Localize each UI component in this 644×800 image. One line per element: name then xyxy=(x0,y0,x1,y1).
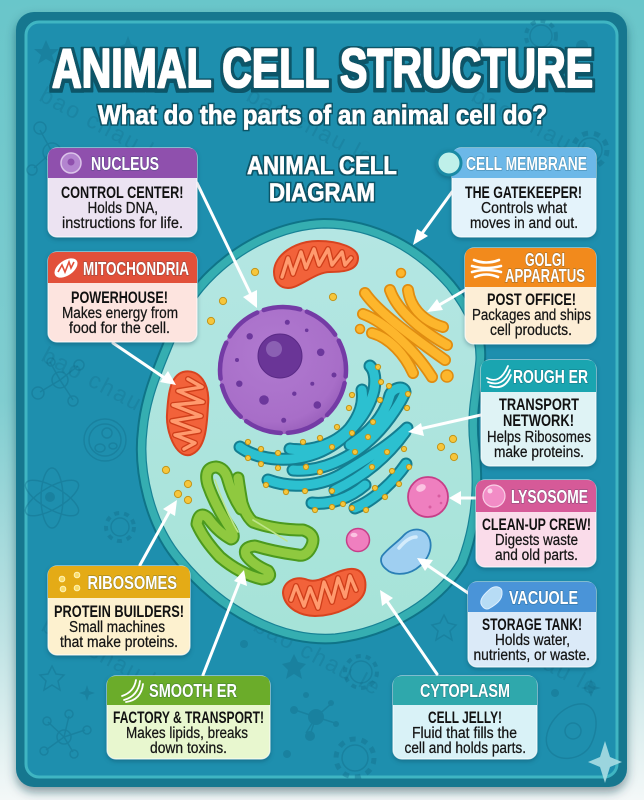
panel: cell membrane: Controls what xyxy=(481,200,568,217)
panel: ribosomes xyxy=(48,566,190,655)
icon: golgi stack xyxy=(472,260,501,277)
panel: rough ER: Helps Ribosomes xyxy=(487,429,591,446)
rough endoplasmic reticulum xyxy=(240,366,407,508)
icon: lysosome xyxy=(483,485,505,507)
panel: golgi apparatus: GOLGI xyxy=(525,250,565,270)
watermark text: bao chau le xyxy=(468,346,604,436)
nucleolus xyxy=(258,334,302,378)
mitochondrion: top xyxy=(274,241,358,288)
panel: nucleus: instructions for life. xyxy=(62,215,183,232)
panel: vacuole: Holds water, xyxy=(495,632,570,649)
icon: ribosome dots xyxy=(59,572,80,592)
panel: golgi apparatus: cell products. xyxy=(490,322,572,339)
panel: cytoplasm: CYTOPLASM xyxy=(420,681,510,701)
diagram heading: DIAGRAM xyxy=(269,179,375,207)
panel: golgi apparatus: Packages and ships xyxy=(472,307,591,324)
mitochondrion: bottom xyxy=(283,569,365,616)
panel: cell membrane: CELL MEMBRANE xyxy=(466,154,587,174)
panel: vacuole xyxy=(468,582,596,667)
ribosomes around the rough ER xyxy=(162,268,458,513)
panel: cell membrane: moves in and out. xyxy=(470,215,578,232)
subtitle: What do the parts of an animal cell do? xyxy=(98,100,547,130)
panel: cytoplasm: Fluid that fills the xyxy=(412,725,517,742)
panel: rough ER: NETWORK! xyxy=(503,412,574,430)
watermark text: bao chau le xyxy=(36,81,172,171)
lysosome: small xyxy=(346,528,370,552)
panel: lysosome: CLEAN-UP CREW! xyxy=(482,516,591,534)
panel: nucleus xyxy=(48,148,197,237)
arrow: rough ER xyxy=(408,415,481,436)
panel: rough ER: make proteins. xyxy=(494,444,584,461)
vacuole xyxy=(381,530,431,574)
watermark text: bao chau le xyxy=(38,341,174,431)
panel: smooth ER: down toxins. xyxy=(150,740,227,757)
icon: membrane circle xyxy=(437,151,461,175)
diagram heading: ANIMAL CELL xyxy=(247,152,397,180)
panel: smooth ER: SMOOTH ER xyxy=(149,681,237,701)
panel: cell membrane: THE GATEKEEPER! xyxy=(465,184,582,202)
mitochondrion: left xyxy=(167,371,208,455)
panel: rough ER: ROUGH ER xyxy=(513,367,588,387)
watermark text xyxy=(36,81,604,701)
panel: golgi apparatus: POST OFFICE! xyxy=(487,291,576,309)
icon: smooth ER xyxy=(122,680,143,702)
panel: vacuole: nutrients, or waste. xyxy=(474,647,590,664)
panel: cytoplasm xyxy=(393,676,537,759)
panel: rough ER: TRANSPORT xyxy=(499,396,579,414)
panel: smooth ER: FACTORY & TRANSPORT! xyxy=(113,709,264,727)
panel: ribosomes: Small machines xyxy=(69,619,165,636)
panel: smooth ER: Makes lipids, breaks xyxy=(126,725,248,742)
arrow: ribosomes xyxy=(140,500,177,565)
watermark text: bao chau le xyxy=(243,81,379,171)
panel: rough ER xyxy=(481,360,596,466)
golgi apparatus xyxy=(356,268,453,382)
panel: nucleus: NUCLEUS xyxy=(91,154,159,174)
panel: nucleus: Holds DNA, xyxy=(88,200,158,217)
panel: nucleus: CONTROL CENTER! xyxy=(61,184,184,202)
panel: cytoplasm: cell and holds parts. xyxy=(404,740,526,757)
panel: vacuole: STORAGE TANK! xyxy=(482,616,582,634)
arrow: lysosome xyxy=(449,491,476,505)
nucleus xyxy=(208,295,358,445)
panel: ribosomes: that make proteins. xyxy=(60,634,178,651)
panel: smooth ER xyxy=(107,676,270,759)
lysosome: large xyxy=(408,477,448,517)
cell diagram xyxy=(142,224,480,638)
icon: corner sparkle xyxy=(588,741,622,783)
watermark text: bao chau le xyxy=(468,611,604,701)
panel: cytoplasm: CELL JELLY! xyxy=(428,709,502,727)
arrow: vacuole xyxy=(417,558,468,593)
cell membrane and cytoplasm xyxy=(142,224,480,638)
panel: mitochondria: MITOCHONDRIA xyxy=(83,259,189,279)
panel: cell membrane xyxy=(437,148,596,237)
panel: mitochondria xyxy=(48,252,197,342)
icon: nucleus xyxy=(61,153,81,173)
watermark text: bao chau le xyxy=(468,81,604,171)
watermark text: bao chau le xyxy=(250,611,386,701)
icon: mitochondrion xyxy=(51,254,81,282)
panel: ribosomes: PROTEIN BUILDERS! xyxy=(54,603,184,621)
panel: mitochondria: food for the cell. xyxy=(69,320,170,337)
panel: ribosomes: RIBOSOMES xyxy=(88,573,177,593)
arrow: nucleus xyxy=(197,183,257,308)
arrow: cell membrane xyxy=(413,192,452,245)
panel: vacuole: VACUOLE xyxy=(509,588,578,608)
panel: lysosome: Digests waste xyxy=(495,532,578,549)
watermark text: bao chau le xyxy=(248,346,384,436)
arrow: smooth ER xyxy=(203,570,247,675)
panel: mitochondria: POWERHOUSE! xyxy=(71,289,168,307)
diagram heading xyxy=(247,152,397,207)
panel: mitochondria: Makes energy from xyxy=(62,305,178,322)
smooth endoplasmic reticulum xyxy=(197,467,313,579)
arrows xyxy=(113,183,481,675)
panel: lysosome xyxy=(476,480,596,567)
icon: rough ER xyxy=(487,366,511,387)
panel: golgi apparatus: APPARATUS xyxy=(505,266,585,286)
arrow: mitochondria xyxy=(113,343,176,385)
icon: vacuole xyxy=(481,587,502,609)
panel: golgi apparatus xyxy=(465,248,596,344)
arrow: golgi xyxy=(427,290,465,312)
watermark text: bao chau le xyxy=(38,611,174,701)
arrow: cytoplasm xyxy=(380,590,437,674)
panel: lysosome: LYSOSOME xyxy=(511,487,588,507)
panel: lysosome: and old parts. xyxy=(495,547,578,564)
